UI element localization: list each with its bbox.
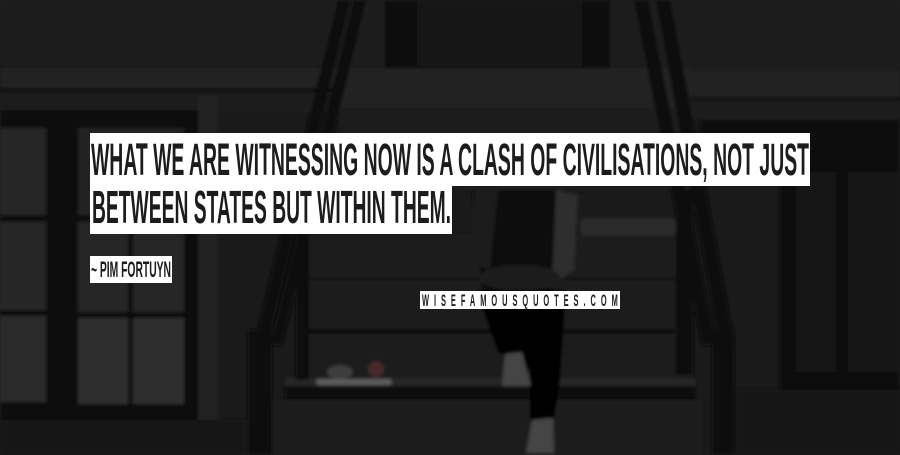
left railing: [248, 0, 366, 455]
upper wall: [0, 0, 900, 68]
door at top of stairs: [340, 0, 690, 108]
sneakers: [502, 352, 554, 453]
seated figure: [470, 120, 578, 420]
stairs: [272, 108, 702, 455]
quote line 2: [90, 181, 452, 234]
right railing: [634, 0, 735, 455]
author: [90, 256, 172, 283]
left window: [0, 95, 245, 455]
site watermark: WISEFAMOUSQUOTES.COM: [422, 291, 618, 310]
cornice band: [0, 68, 900, 119]
plate and apple on steps: [316, 361, 392, 385]
right window: [700, 120, 900, 455]
quote poster: ~ PIM FORTUYN: [91, 257, 171, 282]
